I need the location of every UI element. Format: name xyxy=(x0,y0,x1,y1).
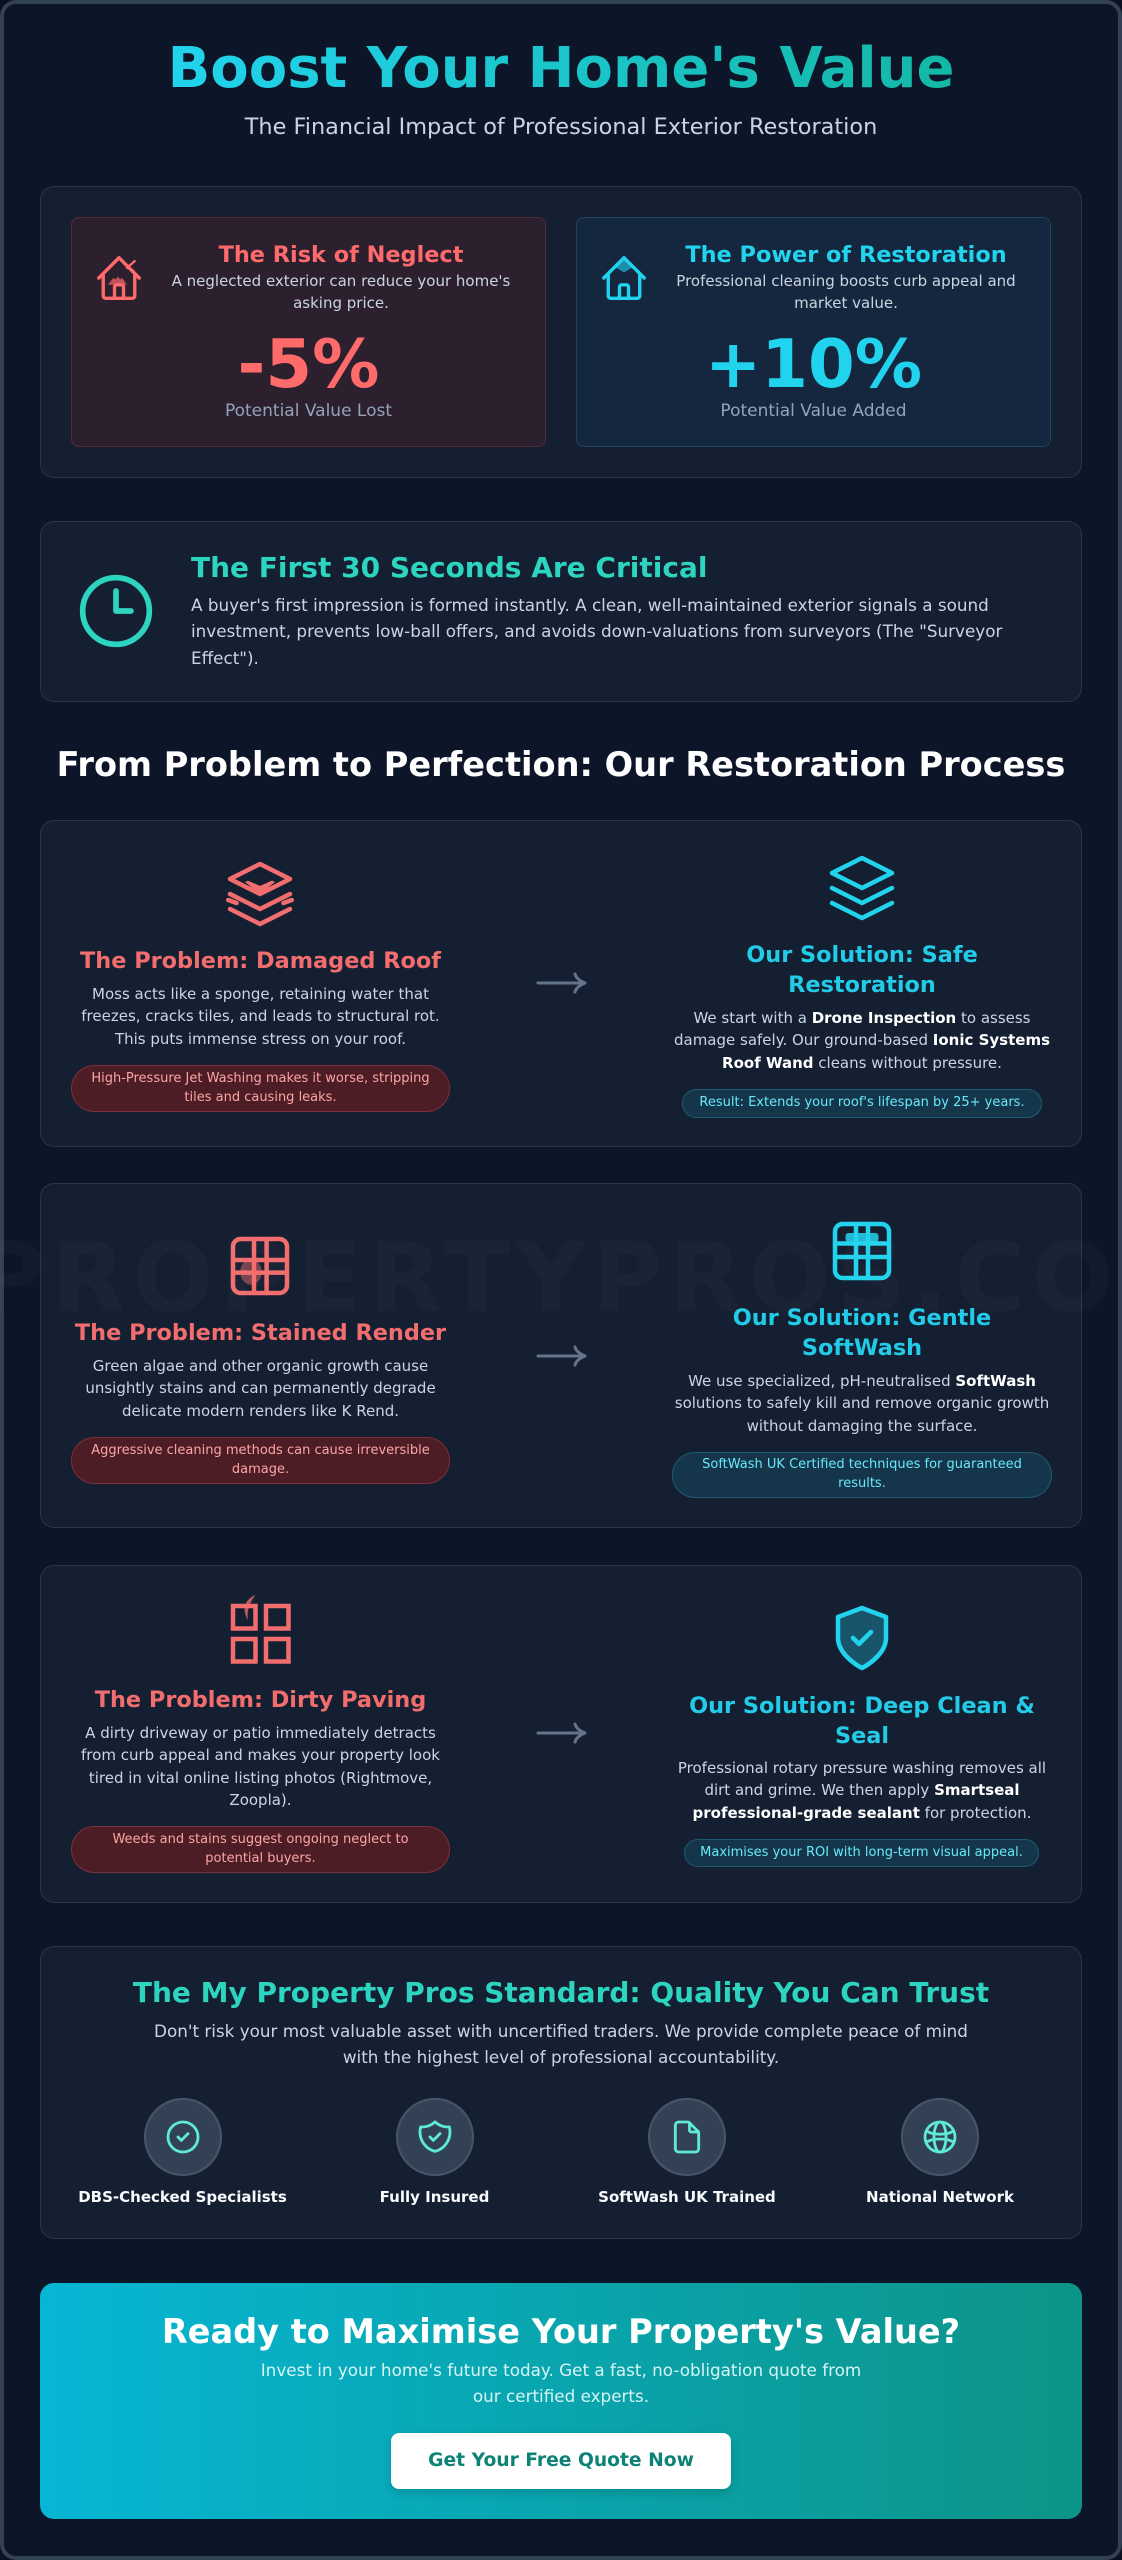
problem text: Zoopla). xyxy=(229,1791,292,1809)
panel: first 30 seconds xyxy=(40,521,1082,702)
problem warning pill: damage. xyxy=(232,1462,289,1476)
badge label: Fully Insured xyxy=(380,2188,489,2206)
badge label: DBS-Checked Specialists xyxy=(78,2188,287,2206)
stat label: Potential Value Added xyxy=(720,401,907,421)
result pill xyxy=(682,1089,1042,1118)
body text xyxy=(191,595,1002,668)
solution text: We start with a Drone Inspection to assess xyxy=(693,1009,1030,1027)
arrow xyxy=(536,1722,586,1744)
problem text: unsightly stains and can permanently degrade xyxy=(85,1379,436,1397)
problem warning pill xyxy=(71,1826,450,1873)
badge label: National Network xyxy=(866,2188,1014,2206)
solution heading: Our Solution: Deep Clean & xyxy=(689,1692,1035,1718)
problem warning pill: tiles and causing leaks. xyxy=(184,1090,337,1104)
description xyxy=(172,272,510,312)
problem text: This puts immense stress on your roof. xyxy=(115,1030,406,1048)
problem heading: The Problem: Stained Render xyxy=(75,1320,446,1346)
heading: The Risk of Neglect xyxy=(219,242,463,268)
problem text: A dirty driveway or patio immediately detracts xyxy=(85,1724,436,1742)
panel: render process xyxy=(40,1183,1082,1528)
result pill xyxy=(684,1839,1039,1867)
body text: investment, prevents low-ball offers, and avoids down-valuations from surveyors (The "Surveyor xyxy=(191,621,1002,641)
problem text: freezes, cracks tiles, and leads to structural rot. xyxy=(81,1007,440,1025)
icon: stained render grid xyxy=(230,1236,290,1296)
solution heading xyxy=(733,1305,991,1361)
icon: clean house xyxy=(602,256,646,300)
button xyxy=(391,2433,731,2489)
solution text xyxy=(675,1372,1049,1435)
icon: damaged roof layers xyxy=(226,862,294,926)
card: risk of neglect xyxy=(71,217,546,447)
badge: trained xyxy=(648,2098,726,2176)
problem warning pill: Aggressive cleaning methods can cause irreversible xyxy=(91,1443,430,1458)
problem text xyxy=(81,1724,440,1809)
problem warning pill: potential buyers. xyxy=(205,1850,316,1866)
button: Get Your Free Quote Now xyxy=(428,2450,694,2471)
result pill: results. xyxy=(838,1476,886,1491)
description: asking price. xyxy=(293,294,389,312)
solution heading: Our Solution: Gentle xyxy=(733,1305,991,1331)
solution text: dirt and grime. We then apply Smartseal xyxy=(704,1781,1020,1799)
body text: Effect"). xyxy=(191,648,259,668)
solution text: professional-grade sealant for protection. xyxy=(693,1804,1031,1822)
problem heading: The Problem: Dirty Paving xyxy=(95,1686,426,1712)
problem text: Moss acts like a sponge, retaining water that xyxy=(92,985,429,1003)
badge: network xyxy=(901,2098,979,2176)
subtitle: The Financial Impact of Professional Exterior Restoration xyxy=(245,114,877,140)
solution text xyxy=(678,1759,1046,1822)
panel: quality standard xyxy=(40,1946,1082,2239)
icon: document xyxy=(674,2120,700,2154)
problem warning pill: Weeds and stains suggest ongoing neglect to xyxy=(112,1832,409,1847)
section heading: From Problem to Perfection: Our Restoration Process xyxy=(57,745,1065,784)
badge label: SoftWash UK Trained xyxy=(598,2188,776,2206)
body text: A buyer's first impression is formed instantly. A clean, well-maintained exterior signals a sound xyxy=(191,595,989,615)
problem text: tired in vital online listing photos (Rightmove, xyxy=(89,1769,432,1787)
solution text xyxy=(674,1009,1050,1072)
result pill: Maximises your ROI with long-term visual appeal. xyxy=(700,1845,1023,1860)
panel: value impact xyxy=(40,186,1082,478)
card: power of restoration xyxy=(576,217,1051,447)
solution text: We use specialized, pH-neutralised SoftWash xyxy=(688,1372,1036,1390)
problem heading: The Problem: Damaged Roof xyxy=(80,948,441,974)
icon: clean roof layers xyxy=(830,856,894,920)
solution heading: Restoration xyxy=(788,972,936,998)
solution text: damage safely. Our ground-based Ionic Systems xyxy=(674,1031,1050,1049)
description: with the highest level of professional accountability. xyxy=(343,2047,779,2067)
heading: The First 30 Seconds Are Critical xyxy=(191,551,707,584)
panel: paving process xyxy=(40,1565,1082,1903)
result pill xyxy=(672,1452,1052,1498)
icon: sealed shield xyxy=(836,1606,888,1670)
result pill: Result: Extends your roof's lifespan by 25+ years. xyxy=(699,1095,1025,1110)
icon: clean render grid xyxy=(832,1222,892,1280)
problem text: delicate modern renders like K Rend. xyxy=(122,1402,399,1420)
solution heading xyxy=(746,942,978,998)
solution heading: SoftWash xyxy=(802,1335,922,1361)
problem text: Green algae and other organic growth cause xyxy=(93,1357,428,1375)
description: Don't risk your most valuable asset with uncertified traders. We provide complete peace of mind xyxy=(154,2020,968,2040)
icon: damaged house xyxy=(97,256,141,300)
icon: clock xyxy=(80,574,152,648)
description xyxy=(261,2360,861,2406)
panel: roof process xyxy=(40,820,1082,1147)
description xyxy=(676,272,1016,312)
solution heading xyxy=(689,1692,1035,1748)
heading: The Power of Restoration xyxy=(685,242,1007,268)
problem text xyxy=(81,985,440,1048)
stat: plus 10 percent: +10% xyxy=(705,325,922,403)
description: Professional cleaning boosts curb appeal and xyxy=(676,272,1016,290)
result pill: SoftWash UK Certified techniques for guaranteed xyxy=(702,1457,1022,1472)
title: Boost Your Home's Value xyxy=(168,36,954,101)
problem text: from curb appeal and makes your property look xyxy=(81,1746,440,1764)
solution heading: Seal xyxy=(835,1722,889,1748)
badge: DBS checked xyxy=(144,2098,222,2176)
solution text: Professional rotary pressure washing removes all xyxy=(678,1759,1046,1777)
solution text: without damaging the surface. xyxy=(747,1417,977,1435)
description: Invest in your home's future today. Get a fast, no-obligation quote from xyxy=(261,2360,861,2380)
problem warning pill: High-Pressure Jet Washing makes it worse, stripping xyxy=(91,1071,430,1086)
icon: dirty paving squares xyxy=(230,1595,291,1664)
description: market value. xyxy=(794,294,898,312)
arrow xyxy=(536,1346,586,1366)
solution text: solutions to safely kill and remove organic growth xyxy=(675,1394,1049,1412)
heading: The My Property Pros Standard: Quality You Can Trust xyxy=(133,1976,989,2009)
description: A neglected exterior can reduce your home's xyxy=(172,272,510,290)
problem warning pill xyxy=(71,1437,450,1484)
solution text: Roof Wand cleans without pressure. xyxy=(722,1054,1002,1072)
heading: Ready to Maximise Your Property's Value? xyxy=(162,2312,960,2351)
badge: insured xyxy=(396,2098,474,2176)
arrow xyxy=(536,972,586,994)
problem warning pill xyxy=(71,1065,450,1112)
problem text xyxy=(85,1357,436,1420)
description xyxy=(154,2020,968,2067)
solution heading: Our Solution: Safe xyxy=(746,942,978,968)
stat label: Potential Value Lost xyxy=(225,401,392,421)
icon: shield check xyxy=(418,2120,452,2153)
description: our certified experts. xyxy=(473,2386,649,2406)
icon: check circle xyxy=(166,2120,200,2154)
icon: globe xyxy=(924,2120,956,2154)
stat: minus 5 percent: -5% xyxy=(238,325,379,403)
call to action xyxy=(40,2283,1082,2519)
